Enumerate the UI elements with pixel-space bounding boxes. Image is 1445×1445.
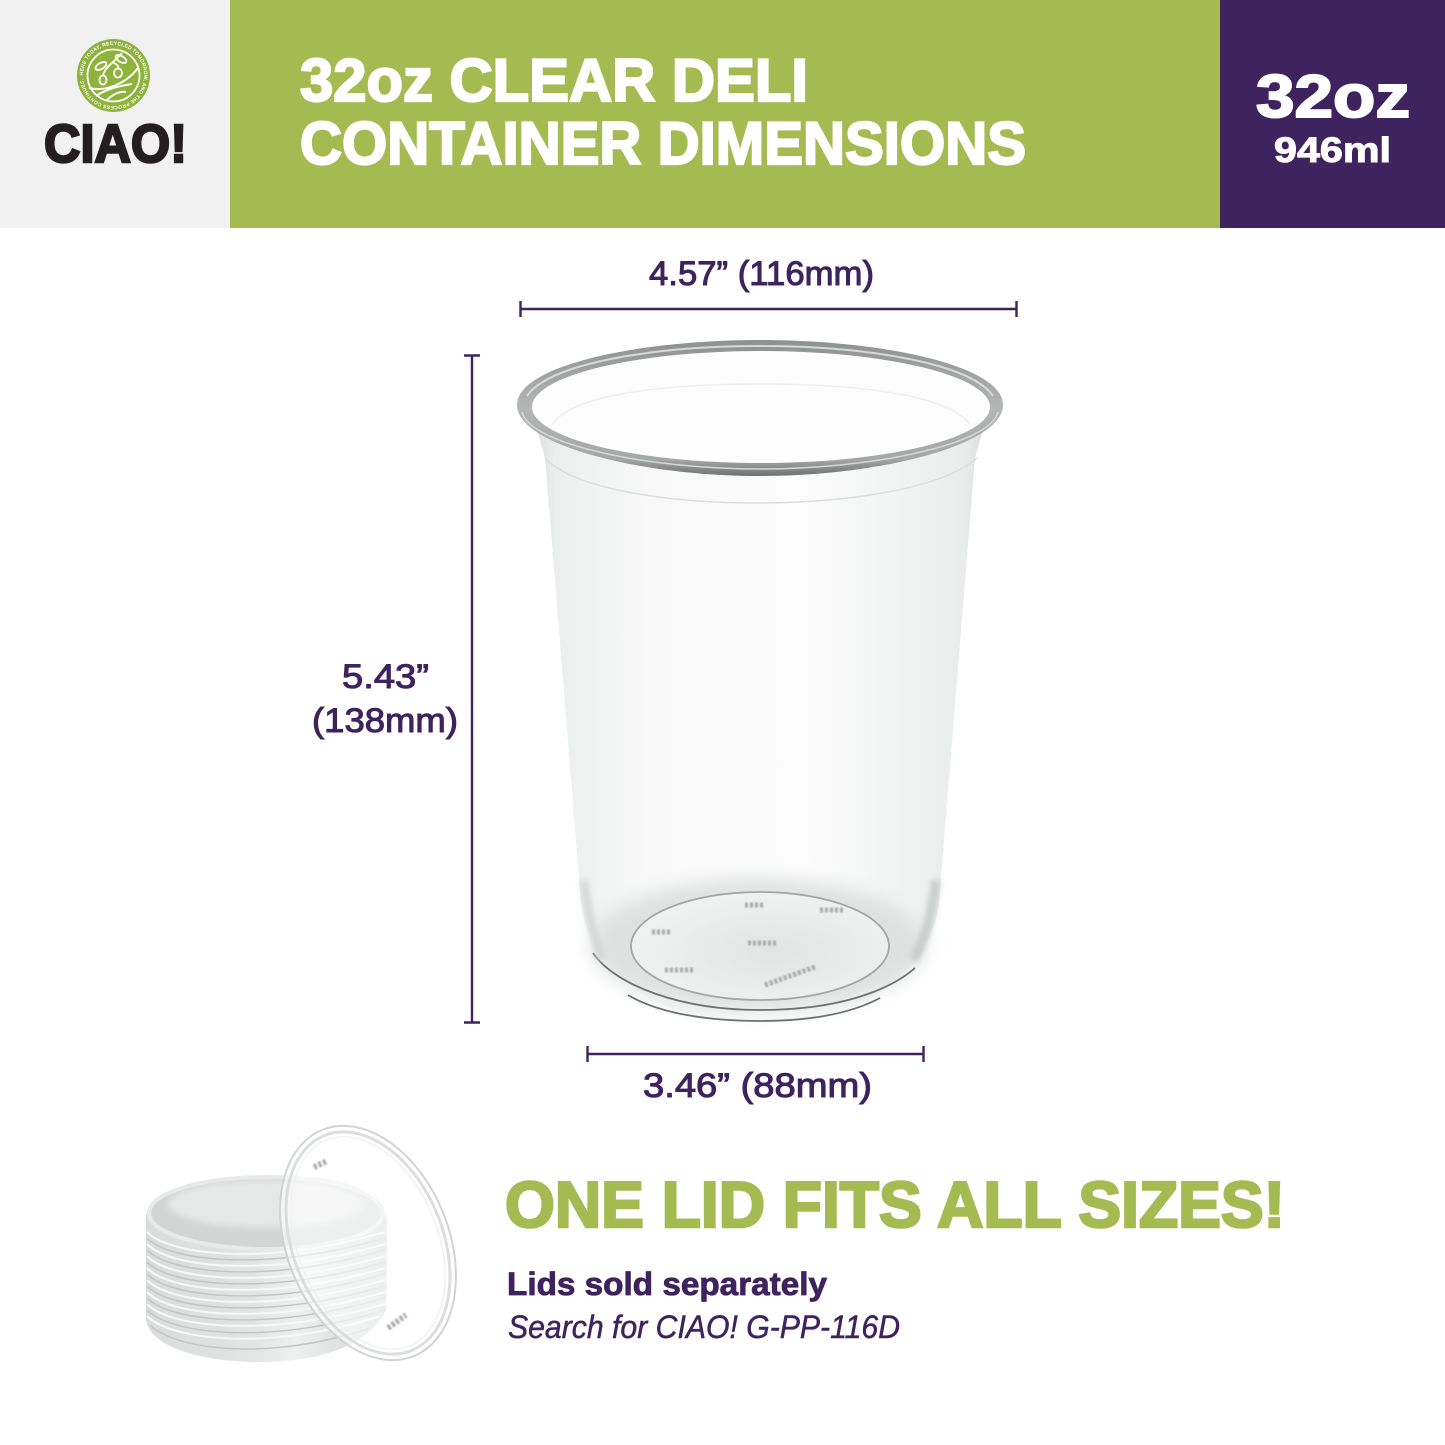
height dimension: 5.43”: [342, 658, 429, 696]
lid stack body: [146, 1176, 387, 1362]
stacked lids: [146, 1100, 489, 1386]
clear deli container: [517, 340, 1003, 1022]
title: [300, 47, 1026, 177]
title: 32oz CLEAR DELI: [300, 47, 808, 114]
lids note: Lids sold separately: [507, 1266, 827, 1302]
container rim: [517, 340, 1003, 476]
container base disc: [631, 892, 889, 1000]
top width dimension: 4.57” (116mm): [649, 255, 874, 293]
bottom width dimension: 3.46” (88mm): [643, 1067, 872, 1105]
capacity badge text: 946ml: [1274, 131, 1391, 170]
height dimension: (138mm): [312, 702, 458, 740]
panel: title banner: [230, 0, 1220, 228]
icon: CIAO round olive badge: HERE TODAY, RECYCLED TOMORROW, AND THE PROCESS CONTINUES.: [80, 42, 148, 110]
lid moulded marks: [314, 1161, 406, 1328]
bottom width dimension: [587, 1046, 924, 1105]
title: CONTAINER DIMENSIONS: [300, 110, 1026, 177]
lids note: [507, 1266, 900, 1345]
lids note: Search for CIAO! G-PP-116D: [508, 1309, 900, 1345]
lids heading: ONE LID FITS ALL SIZES!: [505, 1168, 1285, 1241]
lid stack ridges: [147, 1232, 385, 1339]
logo wordmark: CIAO!: [44, 114, 187, 174]
tilted front lid: [247, 1100, 489, 1386]
panel: capacity badge background: [1220, 0, 1445, 228]
base halo: [590, 879, 926, 1011]
container body: [537, 430, 983, 1022]
inner wall line: [552, 384, 970, 425]
lower ring line: [545, 458, 977, 503]
moulded base marks: [652, 905, 844, 985]
capacity badge text: [1256, 63, 1410, 170]
capacity badge text: 32oz: [1256, 63, 1410, 130]
height dimension: [312, 355, 480, 1023]
base rim lines: [593, 953, 915, 1010]
top width dimension: [520, 255, 1017, 317]
panel: logo background: [0, 0, 230, 228]
